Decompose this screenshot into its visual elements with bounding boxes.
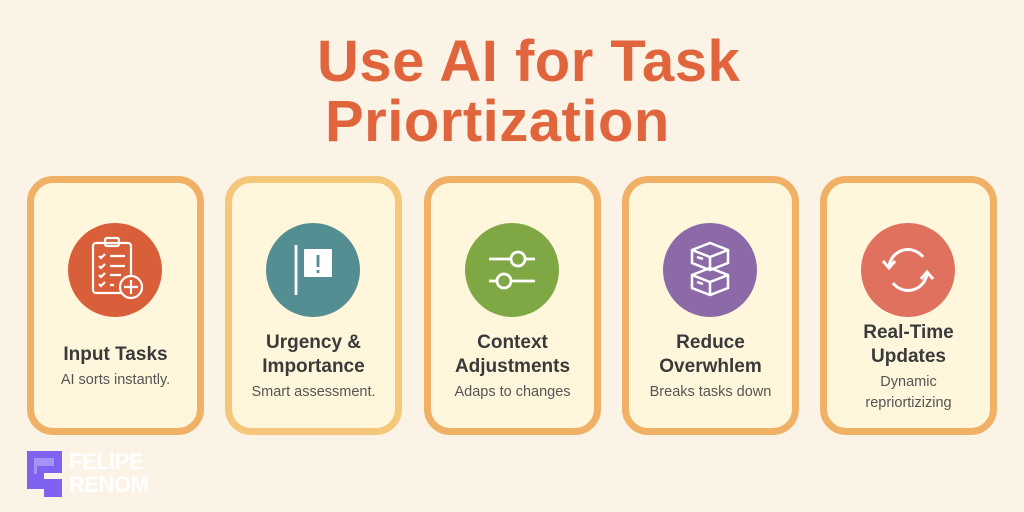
panel: real-time [820, 176, 997, 435]
panel: context [424, 176, 601, 435]
logo: RENOM [69, 472, 148, 497]
text: Breaks tasks down [650, 384, 771, 400]
text: Urgency & [266, 332, 361, 353]
panel: urgency [225, 176, 402, 435]
text [650, 332, 771, 400]
title [317, 29, 740, 154]
text: Real-Time [863, 322, 954, 343]
text: Importance [262, 356, 365, 377]
text: repriortizizing [865, 395, 952, 411]
icon: flag [266, 223, 360, 317]
title: Use AI for Task [317, 29, 740, 94]
text: Updates [871, 346, 946, 367]
icon: clipboard [68, 223, 162, 317]
text: Smart assessment. [251, 384, 376, 400]
text [251, 332, 376, 400]
text: Context [477, 332, 548, 353]
text [863, 322, 954, 411]
icon: boxes [663, 223, 757, 317]
text: Input Tasks [63, 344, 168, 365]
panel: input tasks [27, 176, 204, 435]
text: Dynamic [880, 374, 937, 390]
logo [27, 449, 148, 497]
text [454, 332, 571, 400]
text: Reduce [676, 332, 745, 353]
icon: sliders [465, 223, 559, 317]
panel: reduce [622, 176, 799, 435]
text: Adjustments [455, 356, 570, 377]
text: Overwhlem [659, 356, 762, 377]
text [61, 344, 170, 388]
logo: FELIPE [69, 449, 143, 474]
title: Priortization [325, 89, 670, 154]
text: Adaps to changes [454, 384, 571, 400]
text: AI sorts instantly. [61, 372, 170, 388]
icon: refresh [861, 223, 955, 317]
